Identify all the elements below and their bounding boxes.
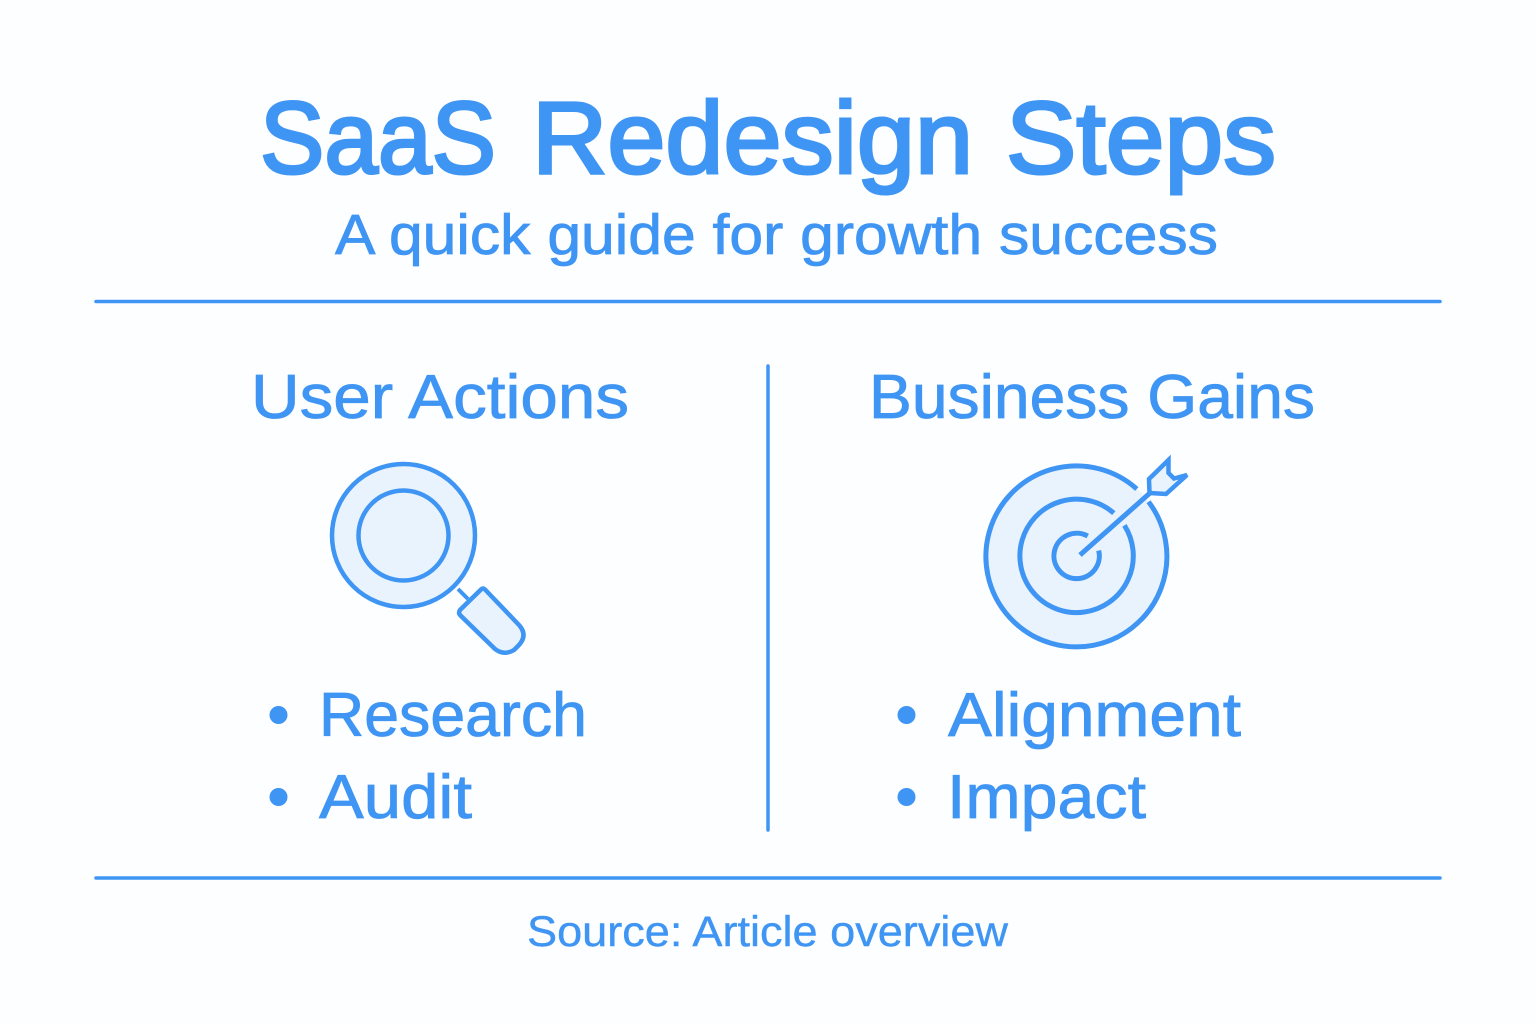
icon: magnifying glass [332, 464, 524, 653]
item: research: Research [319, 681, 587, 750]
subtitle: A quick guide for growth success [335, 203, 1218, 267]
icon: target with arrow [985, 460, 1187, 647]
title: Steps [1006, 81, 1276, 195]
heading: user actions: User Actions [251, 363, 629, 432]
item: alignment: Alignment [948, 681, 1241, 750]
panel: user actions [251, 363, 629, 832]
panel: business gains [869, 363, 1315, 832]
title [260, 81, 1276, 195]
item: audit: Audit [319, 763, 472, 832]
bullet: alignment [898, 706, 916, 724]
list: business gains [898, 681, 1241, 832]
list: user actions [270, 681, 587, 832]
item: impact: Impact [947, 763, 1146, 832]
bullet: research [270, 706, 288, 724]
heading: business gains: Business Gains [869, 363, 1315, 432]
title: Redesign [532, 81, 973, 195]
source note: Source: Article overview [527, 908, 1009, 956]
bullet: audit [270, 788, 288, 806]
bullet: impact [898, 788, 916, 806]
title: SaaS [260, 81, 496, 195]
